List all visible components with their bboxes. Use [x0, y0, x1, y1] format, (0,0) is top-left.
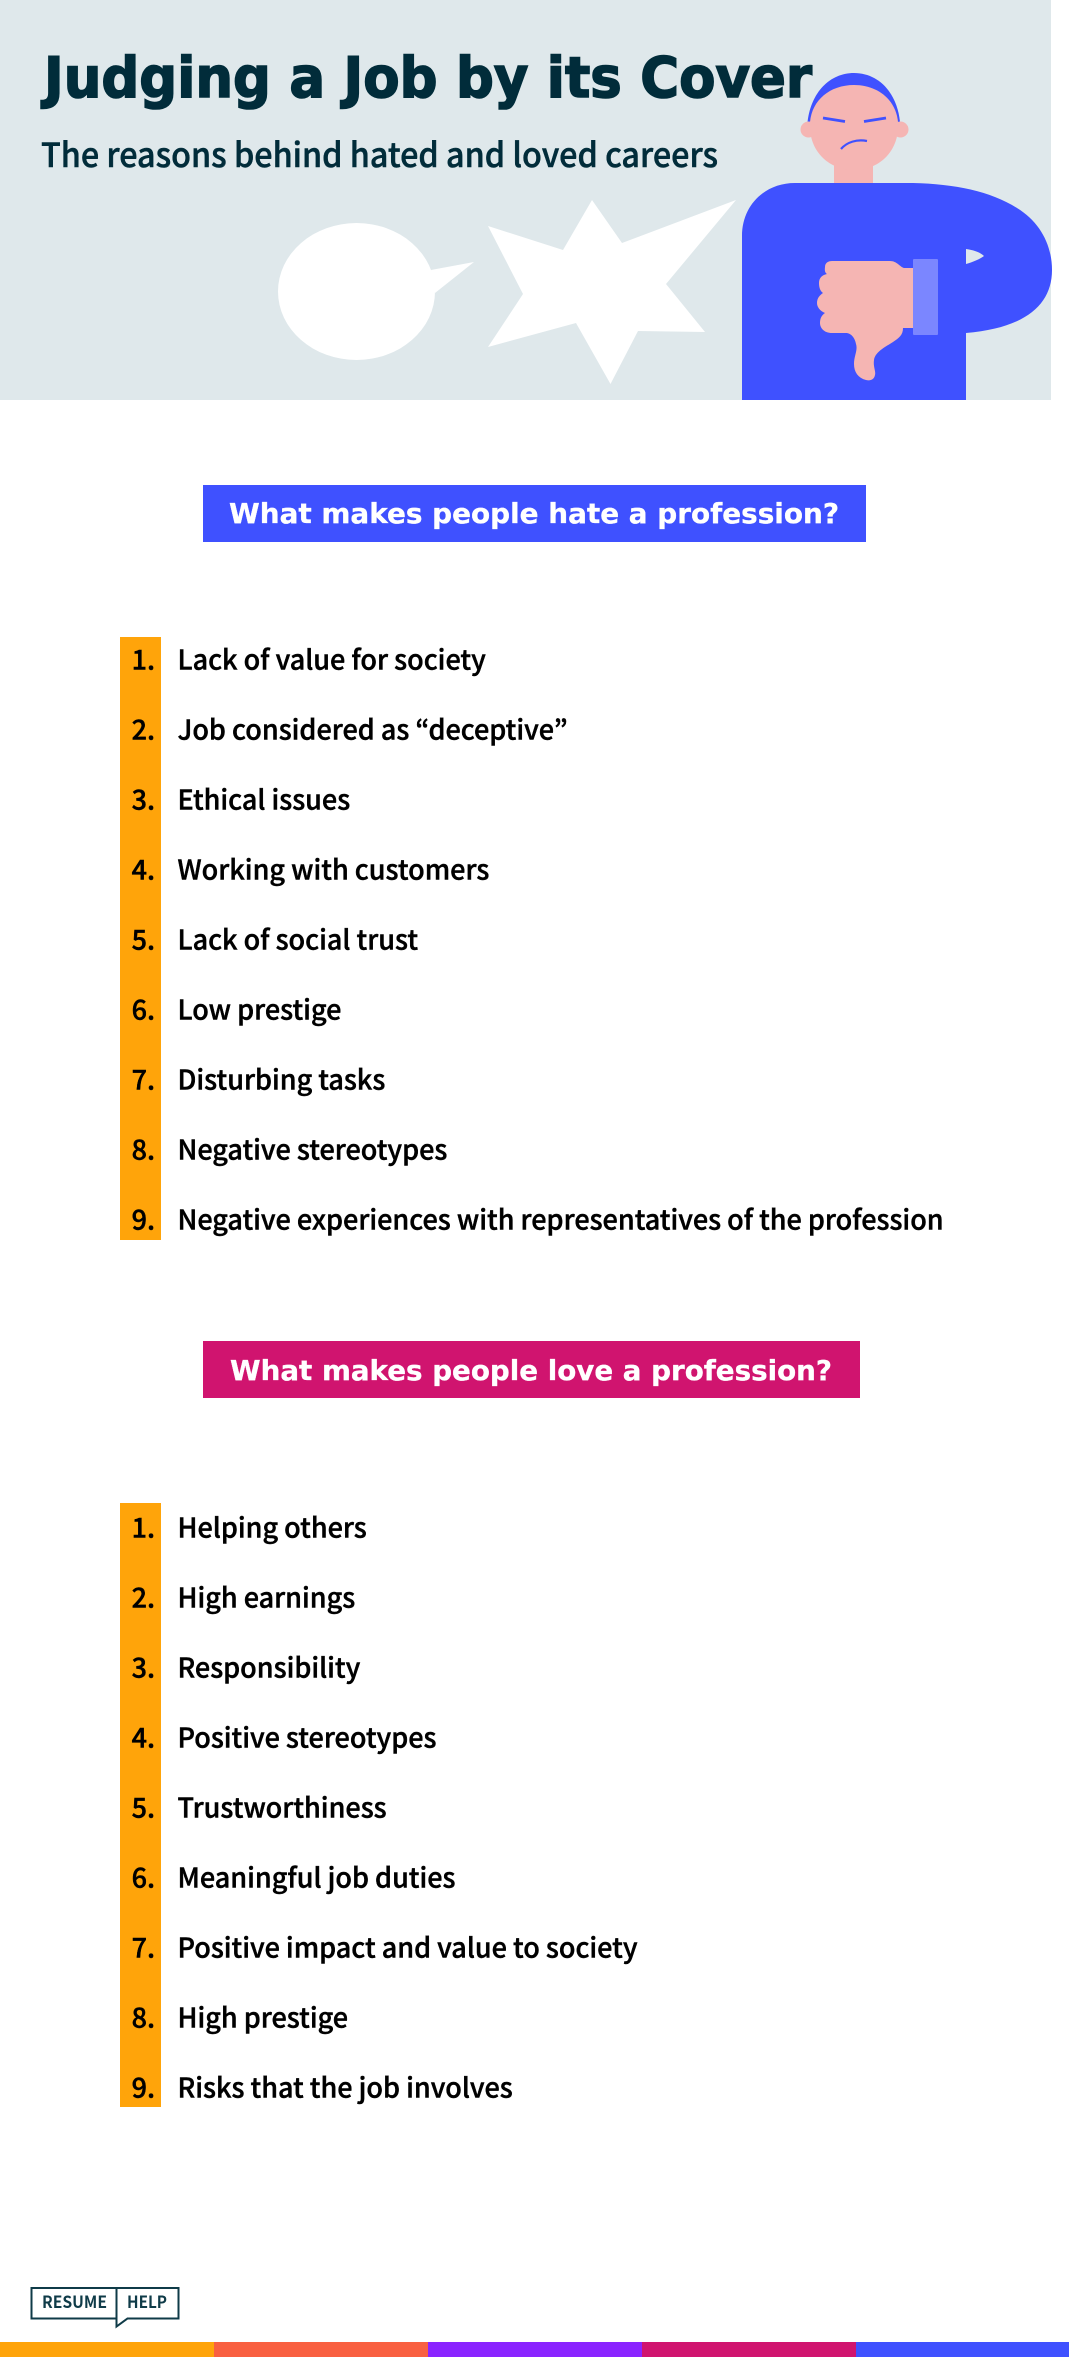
logo: Resume Help: RESUME	[42, 2289, 107, 2313]
list: reasons for hate: 2.	[132, 708, 155, 747]
list: reasons for love: Positive impact and value to society	[178, 1926, 638, 1966]
subtitle: The reasons behind hated and loved careers	[41, 128, 718, 177]
list: reasons for love: 9.	[132, 2066, 155, 2106]
list: reasons for love: 4.	[132, 1716, 155, 1756]
icon: starburst speech bubble	[488, 200, 736, 384]
heading: hate: What makes people hate a profession?	[229, 497, 839, 530]
list: reasons for love: Responsibility	[178, 1646, 361, 1686]
list: reasons for love: 3.	[132, 1646, 155, 1686]
list: reasons for hate: 6.	[132, 988, 155, 1027]
illustration: person with thumbs down	[742, 73, 1052, 400]
hand thumbs down	[817, 261, 914, 380]
heading: hate	[203, 485, 866, 542]
list: reasons for love: 7.	[132, 1926, 155, 1966]
list: reasons for hate: Disturbing tasks	[178, 1058, 385, 1097]
list: reasons for hate: Ethical issues	[178, 778, 350, 817]
list: reasons for hate: Lack of value for society	[178, 638, 486, 677]
list: reasons for hate: 4.	[132, 848, 155, 887]
list: reasons for hate: Negative stereotypes	[178, 1128, 447, 1167]
list: reasons for hate	[120, 637, 944, 1240]
list: reasons for love: High earnings	[178, 1576, 355, 1616]
list: reasons for love: 6.	[132, 1856, 155, 1896]
list: reasons for love: Risks that the job involves	[178, 2066, 513, 2106]
list: reasons for hate: 9.	[132, 1198, 155, 1237]
logo: Resume Help	[32, 2288, 178, 2326]
list: reasons for love: 5.	[132, 1786, 155, 1826]
list: reasons for hate: 8.	[132, 1128, 155, 1167]
heading: love	[203, 1341, 860, 1398]
list: reasons for hate: 5.	[132, 918, 155, 957]
face	[810, 85, 898, 170]
icon: round speech bubble	[278, 223, 474, 360]
list: reasons for love: Positive stereotypes	[178, 1716, 436, 1756]
list: reasons for hate: 3.	[132, 778, 155, 817]
list: reasons for hate: Negative experiences with representatives of the profession	[178, 1198, 944, 1237]
footer colour stripe	[0, 2342, 1069, 2357]
list: reasons for hate: Low prestige	[178, 988, 341, 1027]
panel: header	[0, 0, 1052, 400]
list: reasons for hate: 7.	[132, 1058, 155, 1097]
hair	[808, 73, 900, 122]
torso and arm	[742, 183, 1052, 400]
facial expression	[823, 118, 886, 149]
logo: Resume Help: HELP	[127, 2289, 167, 2313]
list: reasons for love: 2.	[132, 1576, 155, 1616]
list: reasons for hate: Lack of social trust	[178, 918, 418, 957]
neck	[834, 160, 873, 186]
list: reasons for hate: Working with customers	[178, 848, 489, 887]
list: reasons for hate: 1.	[132, 638, 155, 677]
title: Judging a Job by its Cover	[40, 46, 812, 111]
list: reasons for love	[120, 1503, 638, 2107]
heading: love: What makes people love a profession?	[230, 1354, 832, 1387]
list: reasons for love: Trustworthiness	[178, 1786, 387, 1826]
list: reasons for love: 1.	[132, 1506, 155, 1546]
list: reasons for love: Meaningful job duties	[178, 1856, 456, 1896]
list: reasons for love: 8.	[132, 1996, 155, 2036]
list: reasons for love: Helping others	[178, 1506, 367, 1546]
sleeve cuff	[913, 259, 938, 335]
ears	[800, 122, 908, 138]
list: reasons for hate: Job considered as “deceptive”	[178, 708, 568, 747]
list: reasons for love: High prestige	[178, 1996, 348, 2036]
